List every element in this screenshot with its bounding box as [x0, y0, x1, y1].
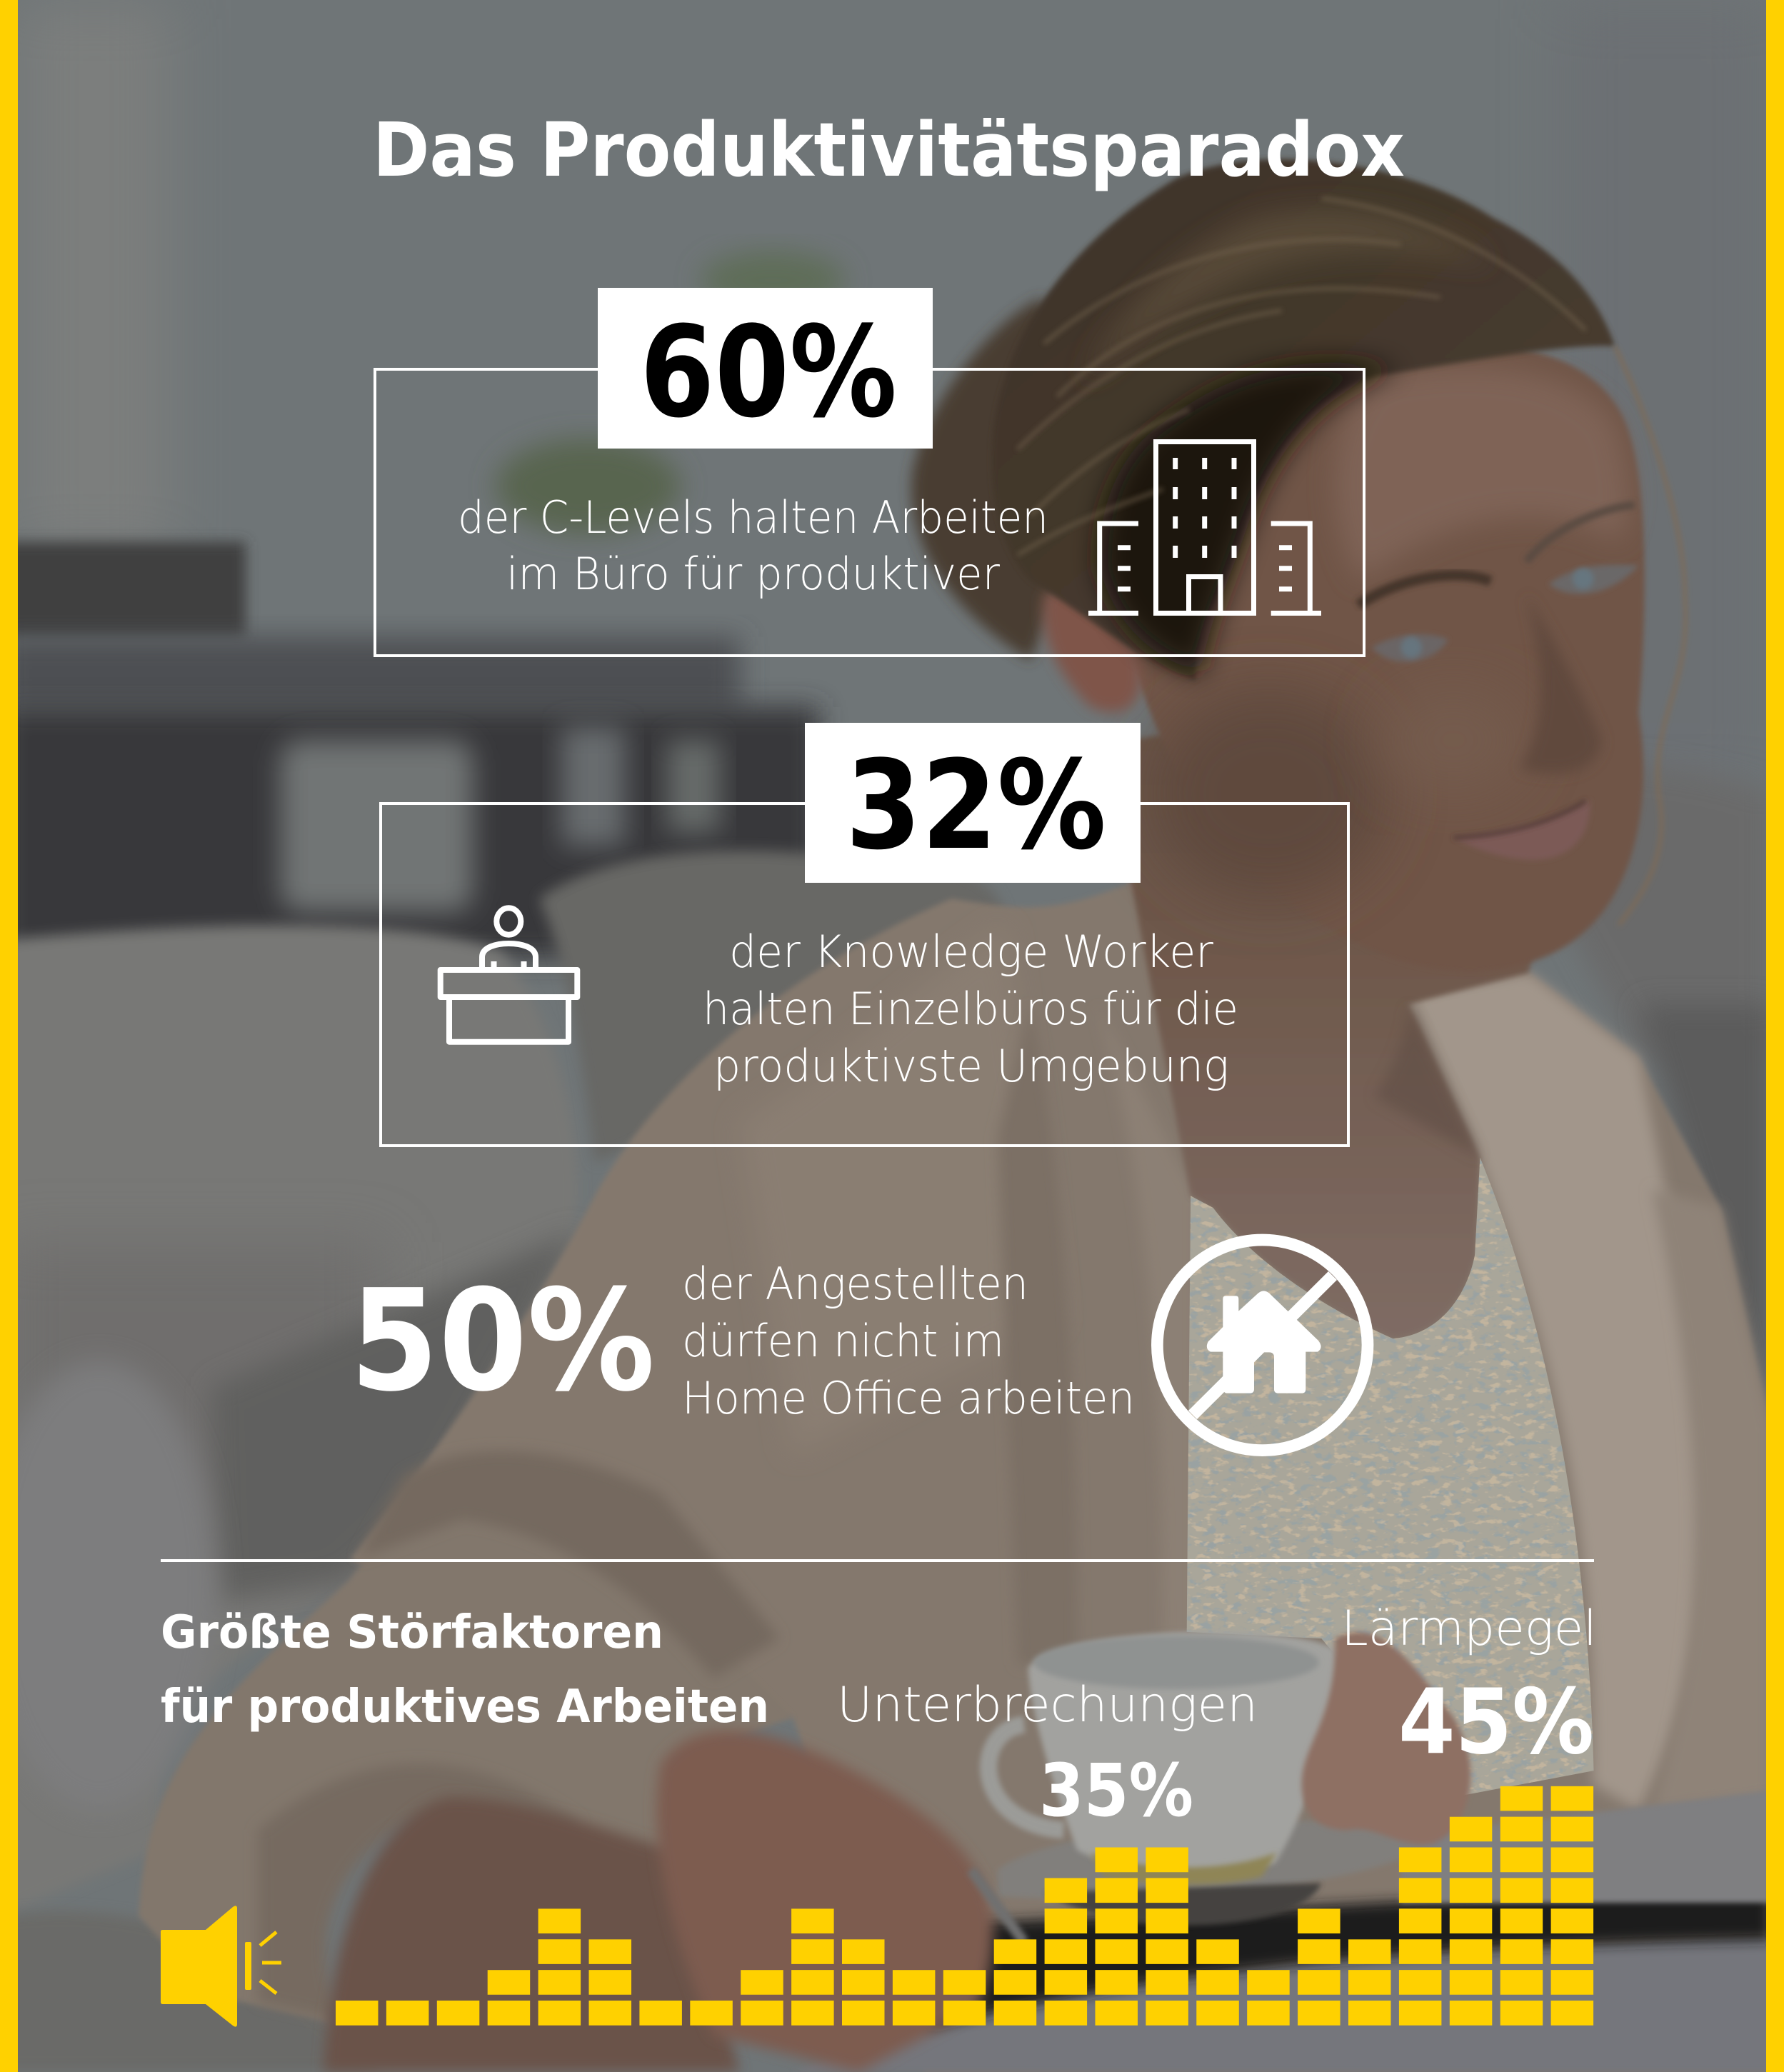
- face: [1123, 346, 1645, 971]
- icon: office buildings: [1088, 441, 1321, 613]
- description: home office not allowed: der Angestellten: [682, 1258, 1028, 1310]
- label: interruptions: Unterbrechungen: [837, 1677, 1258, 1733]
- icon: person at desk: [441, 908, 577, 1042]
- section heading: distractions: [161, 1606, 769, 1733]
- description: home office not allowed: Home Office arbeiten: [682, 1372, 1135, 1424]
- ear: [1043, 587, 1141, 712]
- description: home office not allowed: dürfen nicht im: [682, 1315, 1004, 1367]
- stat badge 32%: 32%: [846, 734, 1106, 877]
- title: Das Produktivitätsparadox: [373, 106, 1405, 194]
- right lapel: [1408, 973, 1708, 1811]
- label: noise level: [1341, 1601, 1597, 1774]
- description: home office not allowed: [682, 1258, 1135, 1424]
- description text: der C-Levels halten Arbeiten: [458, 491, 1048, 544]
- description text: der Knowledge Worker: [729, 926, 1213, 978]
- description text: [703, 926, 1238, 1092]
- hair: [991, 159, 1615, 681]
- loose strands: [1615, 346, 1685, 925]
- description text: [458, 491, 1048, 600]
- sleeve: [139, 1498, 793, 2022]
- stat badge 60%: 60%: [640, 299, 897, 446]
- label: noise level: Lärmpegel: [1341, 1601, 1597, 1657]
- icon: no home office: [1157, 1240, 1368, 1451]
- forearm: [324, 1797, 740, 2072]
- panel: 32 percent Knowledge Worker: [381, 723, 1348, 1146]
- label: interruptions: [837, 1677, 1258, 1833]
- neck and chest: [1131, 661, 1585, 1338]
- yellow side border right: [1766, 0, 1784, 2072]
- stat: 50 percent: 50%: [350, 1260, 655, 1423]
- icon: loudspeaker: [161, 1906, 281, 2027]
- divider line: [161, 1559, 1594, 1562]
- description text: halten Einzelbüros für die: [703, 983, 1238, 1035]
- description text: produktivste Umgebung: [713, 1040, 1229, 1092]
- cup, saucer, hands: [998, 1821, 1434, 1899]
- section heading: distractions: Größte Störfaktoren: [161, 1606, 663, 1659]
- label: interruptions: 35%: [1039, 1748, 1193, 1833]
- table and paper: [793, 1936, 1770, 2072]
- knit top: [1187, 1158, 1594, 1794]
- panel: 60 percent C-Levels: [375, 288, 1364, 656]
- brows, eyes, lips: [1358, 575, 1490, 605]
- description text: im Büro für produktiver: [506, 548, 1000, 600]
- yellow side border left: [0, 0, 18, 2072]
- sofa: [0, 926, 578, 1916]
- label: noise level: 45%: [1398, 1669, 1594, 1774]
- equalizer bar chart: [336, 1786, 1593, 2026]
- section heading: distractions: für produktives Arbeiten: [161, 1681, 769, 1733]
- cardigan body: [350, 883, 1770, 2072]
- ponytail: [911, 297, 1071, 661]
